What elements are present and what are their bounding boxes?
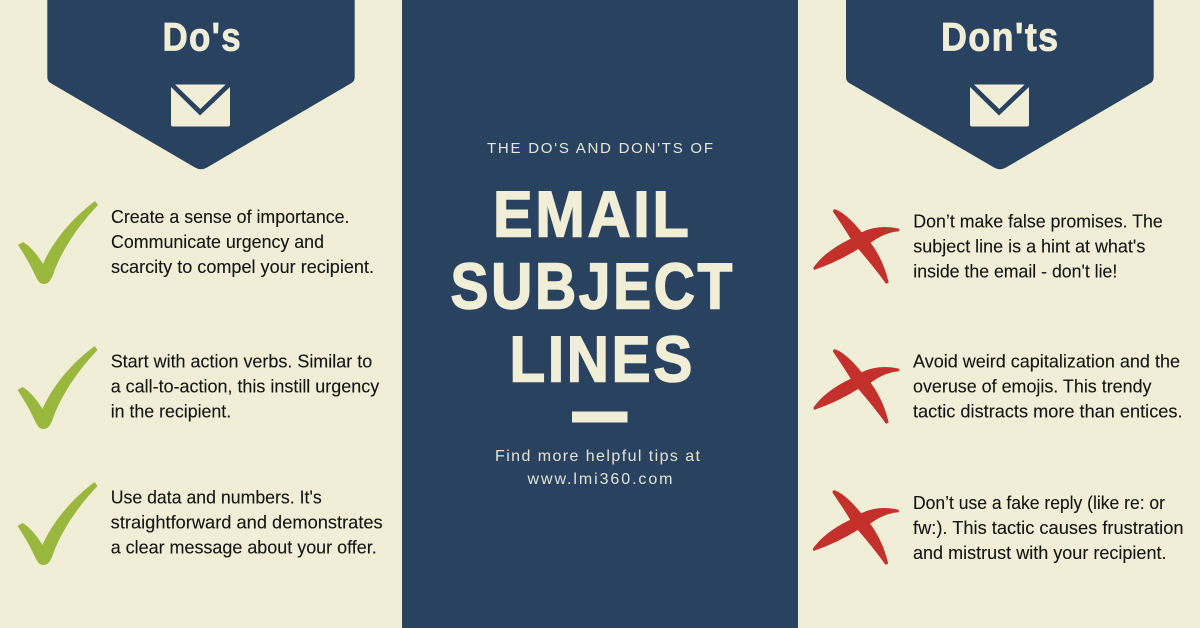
don't text 1: inside the email - don't lie! — [913, 261, 1117, 281]
main title — [450, 178, 735, 396]
do text 2: in the recipient. — [111, 402, 231, 422]
icon: red cross — [813, 209, 899, 284]
panel: center title column — [402, 0, 798, 628]
do text 2: Start with action verbs. Similar to — [111, 352, 372, 372]
don't text 3 — [913, 493, 1184, 563]
don't text 1 — [913, 211, 1163, 281]
do text 3 — [111, 487, 383, 557]
don't text 3: and mistrust with your recipient. — [913, 543, 1166, 563]
icon: red cross — [813, 490, 899, 565]
do text 1: Create a sense of importance. — [111, 207, 350, 227]
do text 3: a clear message about your offer. — [111, 537, 377, 557]
do's header banner — [47, 0, 355, 169]
don'ts header banner — [846, 0, 1154, 169]
don't text 1: subject line is a hint at what's — [913, 236, 1145, 256]
don't text 2 — [913, 352, 1182, 422]
icon: envelope — [171, 84, 230, 126]
do's heading: Do's — [162, 16, 242, 60]
do text 3: Use data and numbers. It's — [111, 487, 322, 507]
do text 1: scarcity to compel your recipient. — [111, 257, 374, 277]
eyebrow text: THE DO'S AND DON'TS OF — [487, 140, 713, 157]
don't item 3 — [813, 490, 1184, 565]
don'ts heading: Don'ts — [941, 16, 1060, 60]
do item 3 — [18, 482, 383, 565]
footer link text: Find more helpful tips at — [495, 448, 701, 465]
don't item 2 — [813, 349, 1182, 424]
don't text 2: tactic distracts more than entices. — [913, 402, 1182, 422]
footer link text — [495, 448, 701, 488]
do text 2 — [111, 352, 379, 422]
main title: SUBJECT — [450, 250, 735, 322]
icon: envelope — [970, 84, 1029, 126]
icon: green check — [18, 201, 98, 284]
do text 1: Communicate urgency and — [111, 232, 324, 252]
title divider bar — [572, 412, 628, 422]
icon: green check — [18, 482, 98, 565]
main title: EMAIL — [493, 178, 692, 250]
icon: green check — [18, 346, 98, 429]
don't text 3: fw:). This tactic causes frustration — [913, 518, 1184, 538]
don't text 2: overuse of emojis. This trendy — [913, 376, 1152, 396]
do item 1 — [18, 201, 374, 284]
don't item 1 — [813, 209, 1163, 284]
panel: do's column — [18, 0, 383, 565]
icon: red cross — [813, 349, 899, 424]
footer link text: www.lmi360.com — [526, 471, 672, 488]
do text 3: straightforward and demonstrates — [111, 512, 383, 532]
do item 2 — [18, 346, 379, 429]
main title: LINES — [510, 322, 695, 396]
don't text 1: Don’t make false promises. The — [913, 211, 1163, 231]
panel: don'ts column — [813, 0, 1184, 565]
don't text 3: Don’t use a fake reply (like re: or — [913, 493, 1165, 513]
do text 1 — [111, 207, 374, 277]
don't text 2: Avoid weird capitalization and the — [913, 352, 1180, 372]
do text 2: a call-to-action, this instill urgency — [111, 376, 379, 396]
